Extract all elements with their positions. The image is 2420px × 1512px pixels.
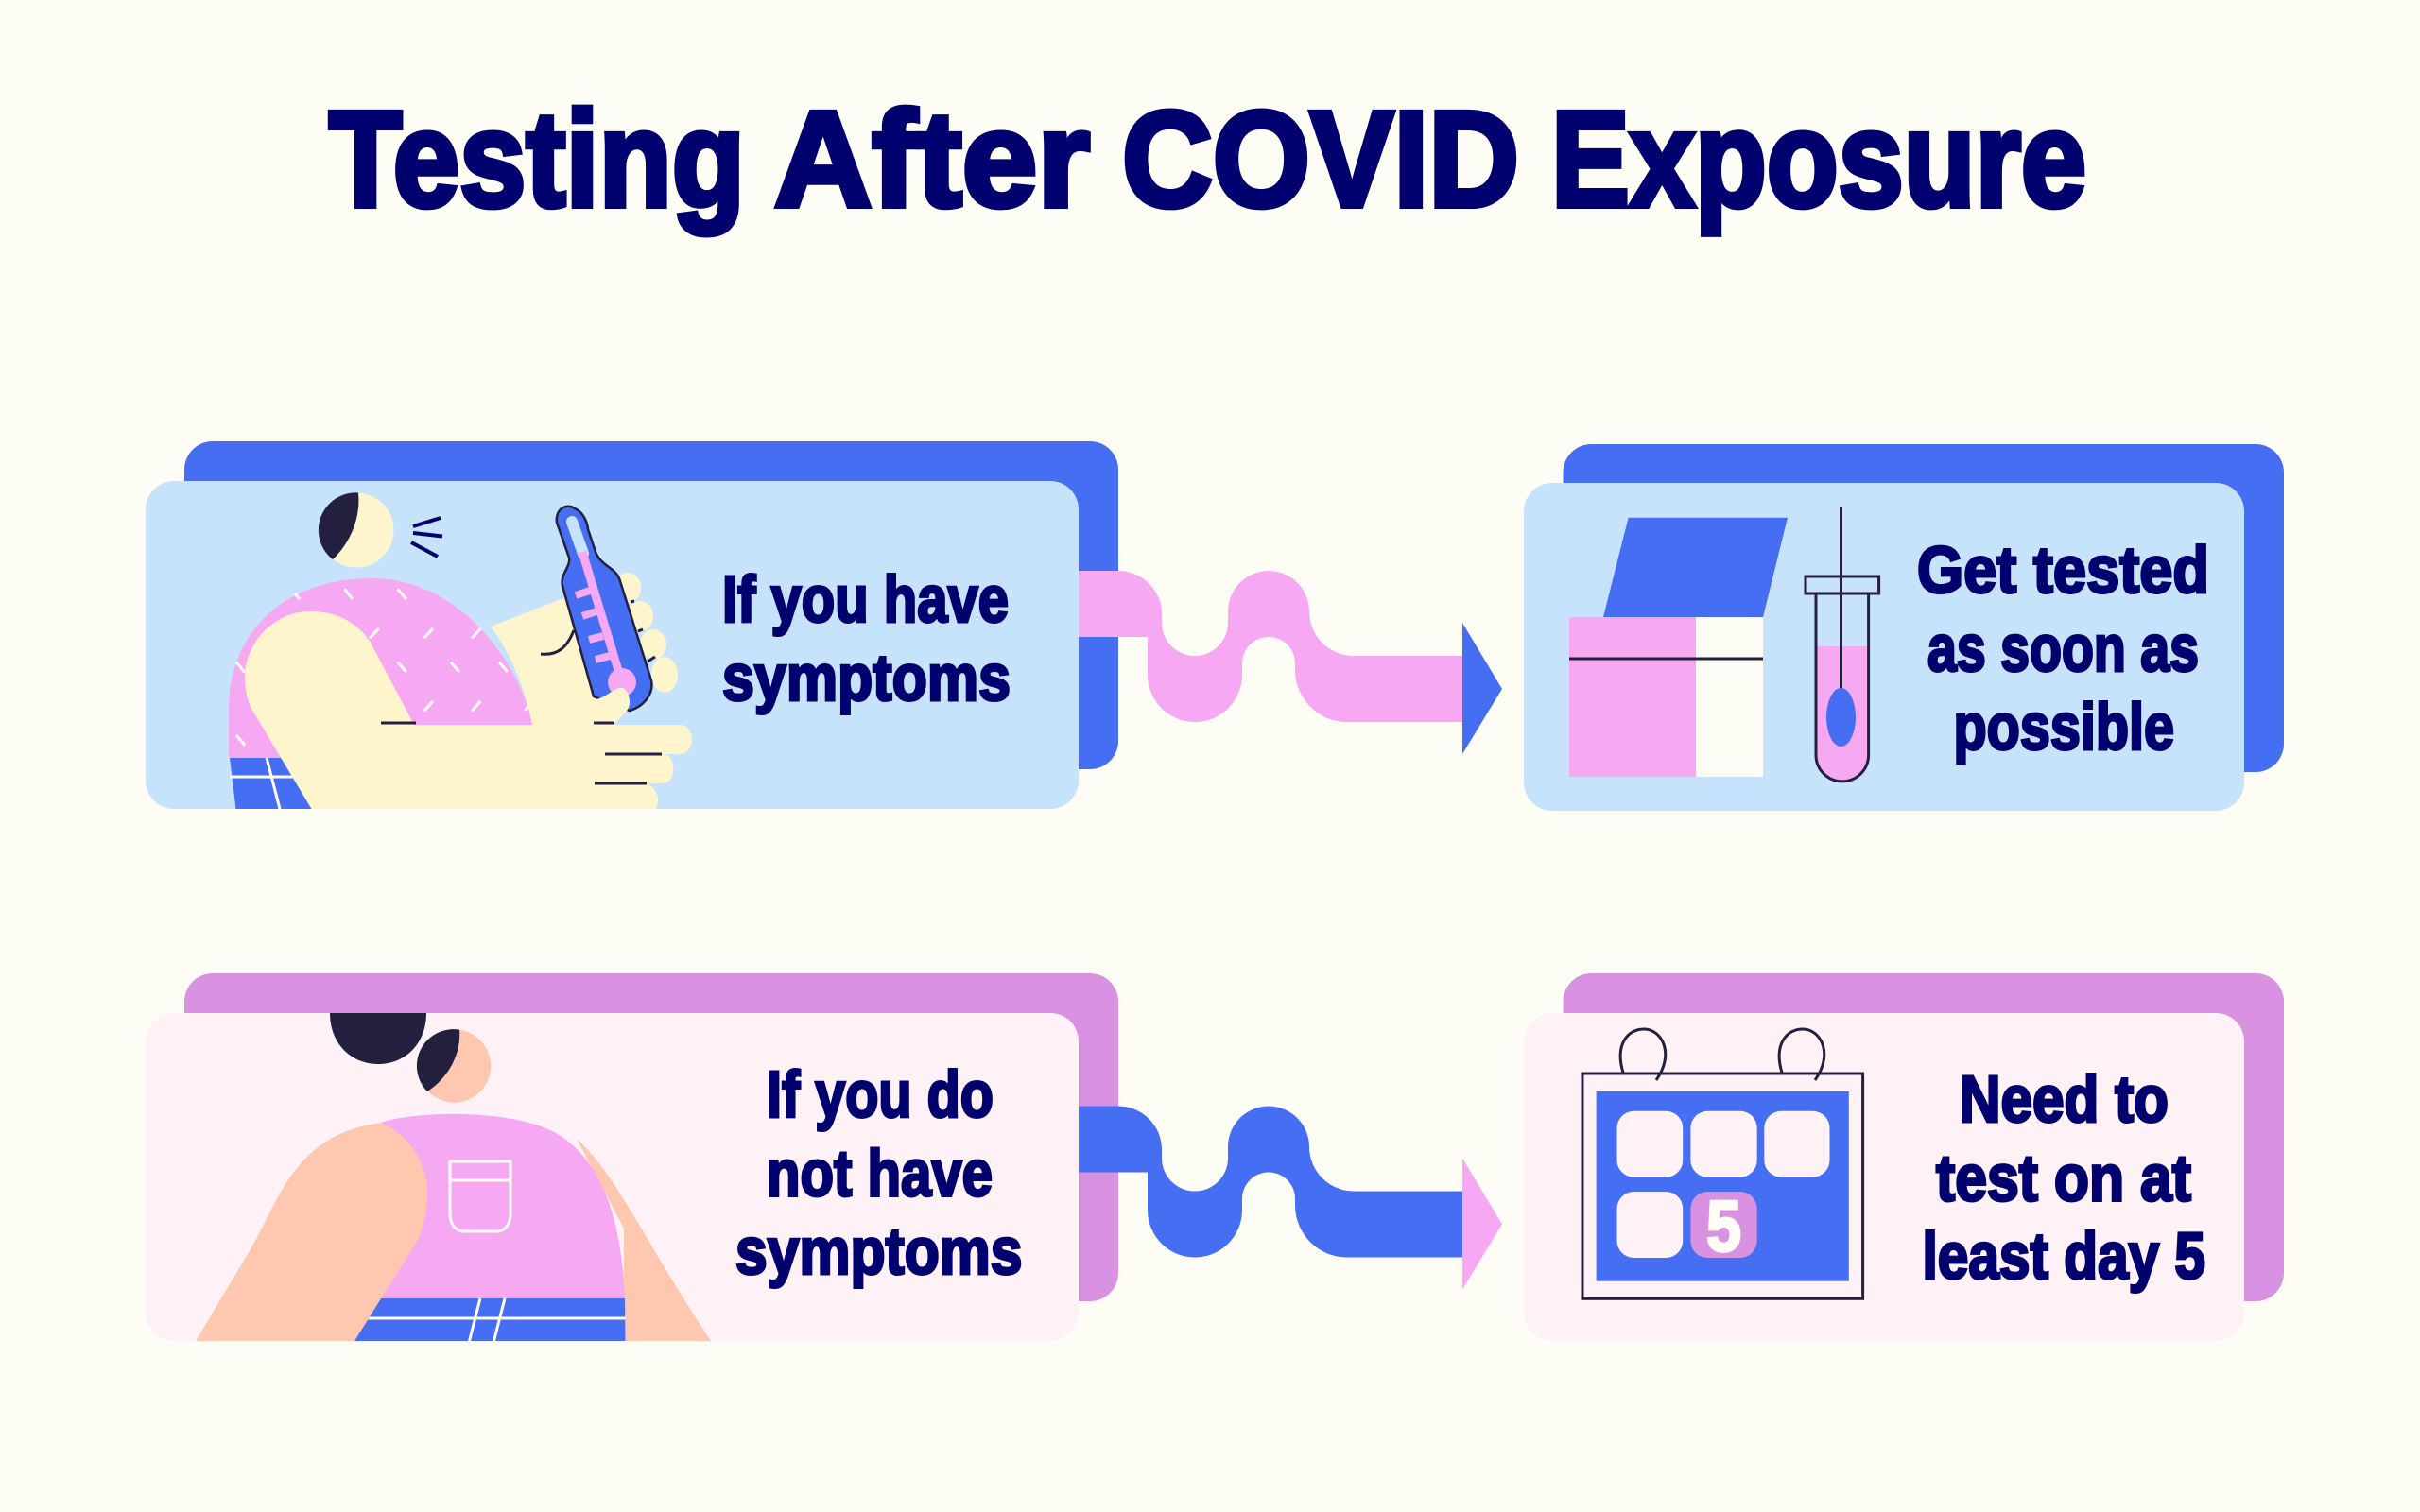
text: if you have symptoms: symptoms <box>722 641 1011 714</box>
text: if you do not have symptoms: symptoms <box>735 1214 1023 1288</box>
panel: if you have symptoms <box>146 441 1118 809</box>
illustration: person without symptoms <box>196 1013 711 1341</box>
text: if you have symptoms <box>722 562 1011 714</box>
text: need to test on at least day 5: Need to <box>1960 1062 2169 1136</box>
shorts <box>230 758 312 809</box>
icon: test kit box <box>1569 518 1788 777</box>
highlighted day 5: 5 <box>1706 1187 1741 1267</box>
panel: if you do not have symptoms <box>146 973 1118 1341</box>
left arm <box>196 1123 427 1341</box>
crease lines <box>381 601 662 783</box>
title: COVID <box>1122 83 1519 235</box>
illustration: person holding thermometer <box>229 492 692 809</box>
title: Exposure <box>1551 83 2086 235</box>
text: if you do not have symptoms: If you do <box>767 1057 994 1131</box>
icon: thermometer <box>557 507 651 711</box>
text: if you do not have symptoms <box>735 1057 1023 1288</box>
highlighted day 5 <box>1690 1187 1757 1267</box>
raised forearm and fingers <box>491 573 678 725</box>
shorts <box>354 1298 626 1341</box>
text: need to test on at least day 5 <box>1923 1062 2205 1293</box>
text: get tested as soon as possible: as soon as <box>1927 611 2199 685</box>
right arm <box>577 1139 711 1341</box>
text: get tested as soon as possible: possible <box>1953 690 2174 764</box>
sweater <box>229 578 533 758</box>
panel: get tested <box>1524 444 2284 811</box>
title: After <box>774 83 1090 235</box>
head <box>319 492 393 567</box>
text: get tested as soon as possible <box>1917 533 2209 764</box>
text: if you have symptoms: If you have <box>722 562 1009 636</box>
icon: calendar <box>1582 1029 1863 1298</box>
upper arm and hand <box>245 611 692 809</box>
panel: need to test on day 5 <box>1524 973 2284 1341</box>
arrow: blue ribbon to test on day 5 <box>1079 1106 1502 1289</box>
text: need to test on at least day 5: least day 5 <box>1923 1219 2205 1293</box>
title <box>329 83 2086 235</box>
head <box>417 1029 491 1103</box>
icon: fever lines <box>411 518 442 557</box>
hair bun <box>330 1013 426 1064</box>
text: get tested as soon as possible: Get tested <box>1917 533 2209 607</box>
title: Testing <box>329 83 745 235</box>
top <box>359 1114 625 1298</box>
pocket <box>450 1161 510 1231</box>
text: need to test on at least day 5: test on at <box>1936 1142 2191 1215</box>
text: if you do not have symptoms: not have <box>767 1136 993 1210</box>
arrow: pink ribbon to get tested <box>1079 571 1502 754</box>
icon: test tube with swab <box>1806 507 1879 782</box>
